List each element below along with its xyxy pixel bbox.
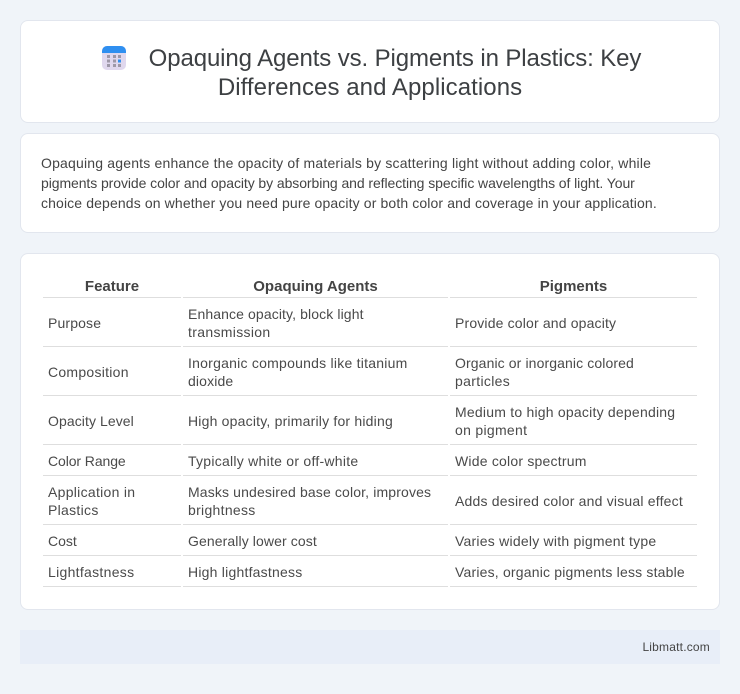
table rules: [43, 297, 697, 587]
row: Cost: Varies widely with pigment type: [455, 533, 656, 549]
row: Composition: Organic or inorganic colored: [455, 355, 634, 371]
row: Application in Plastics: Application in: [48, 484, 135, 500]
row: Purpose: Provide color and opacity: [455, 315, 616, 331]
row: Cost: Cost: [48, 533, 77, 549]
row: Composition: Inorganic compounds like titanium: [188, 355, 408, 371]
row: Cost: Generally lower cost: [188, 533, 317, 549]
table header: Feature: [85, 278, 139, 295]
intro text: Opaquing agents enhance the opacity of materials by scattering light without adding color, while: [41, 155, 651, 171]
row: Lightfastness: Lightfastness: [48, 564, 134, 580]
comparison table: [43, 278, 697, 587]
row: Composition: Composition: [48, 364, 129, 380]
row: Opacity Level: Medium to high opacity depending: [455, 404, 675, 420]
row: Composition: dioxide: [188, 373, 233, 389]
row: Lightfastness: Varies, organic pigments less stable: [455, 564, 685, 580]
panel: intro card: [20, 133, 720, 233]
row: Lightfastness: [48, 564, 685, 580]
row: Color Range: Color Range: [48, 453, 126, 469]
title: [149, 45, 642, 101]
footer credit: Libmatt.com: [642, 640, 710, 654]
title: Opaquing Agents vs. Pigments in Plastics: Key: [149, 45, 641, 72]
row: Color Range: Typically white or off-white: [188, 453, 358, 469]
row: Composition: particles: [455, 373, 510, 389]
table header: Opaquing Agents: [253, 278, 378, 295]
intro text: [41, 155, 657, 211]
intro text: choice depends on whether you need pure opacity or both color and coverage in your application.: [41, 195, 657, 211]
row: Lightfastness: High lightfastness: [188, 564, 302, 580]
row: Color Range: [48, 453, 587, 469]
intro text: pigments provide color and opacity by absorbing and reflecting specific wavelengths of light. Your: [41, 175, 635, 191]
row: Composition: [48, 355, 634, 389]
row: Application in Plastics: [48, 484, 683, 518]
table header: [85, 278, 607, 295]
row: Purpose: transmission: [188, 324, 271, 340]
row: Opacity Level: on pigment: [455, 422, 527, 438]
title: Differences and Applications: [218, 74, 522, 101]
row: Application in Plastics: Masks undesired base color, improves: [188, 484, 431, 500]
row: Color Range: Wide color spectrum: [455, 453, 587, 469]
row: Purpose: Enhance opacity, block light: [188, 306, 364, 322]
row: Purpose: Purpose: [48, 315, 101, 331]
row: Application in Plastics: Plastics: [48, 502, 99, 518]
row: Application in Plastics: brightness: [188, 502, 256, 518]
row: Opacity Level: Opacity Level: [48, 413, 134, 429]
footer bar: [20, 630, 720, 664]
icon: calendar grid: [102, 46, 126, 70]
row: Application in Plastics: Adds desired color and visual effect: [455, 493, 683, 509]
row: Cost: [48, 533, 656, 549]
panel: title card: [20, 20, 720, 123]
row: Opacity Level: [48, 404, 675, 438]
row: Opacity Level: High opacity, primarily for hiding: [188, 413, 393, 429]
panel: comparison table card: [20, 253, 720, 610]
row: Purpose: [48, 306, 616, 340]
table header: Pigments: [540, 278, 607, 295]
